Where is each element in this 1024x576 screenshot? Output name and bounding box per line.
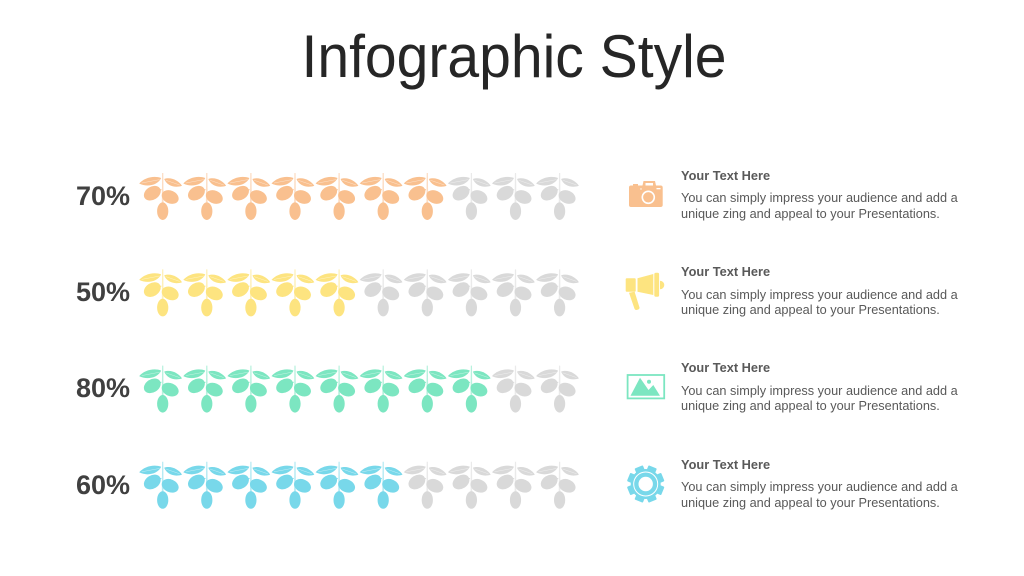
row 4 sprigs: 60% bbox=[139, 462, 579, 509]
percentage: 50%: 50% bbox=[76, 277, 130, 307]
text block 1: Your Text Here bbox=[681, 168, 770, 182]
title: Infographic Style bbox=[301, 22, 726, 90]
icon: picture bbox=[628, 375, 664, 398]
text block 4: unique zing and appeal to your Presentations. bbox=[681, 495, 940, 510]
text block 2: unique zing and appeal to your Presentations. bbox=[681, 302, 940, 317]
text block 3: You can simply impress your audience and add a bbox=[681, 383, 958, 398]
percentage: 70%: 70% bbox=[76, 181, 130, 211]
percentage: 80%: 80% bbox=[76, 373, 130, 403]
icon: gear bbox=[622, 460, 670, 508]
text block 1: You can simply impress your audience and add a bbox=[681, 190, 958, 205]
text block 2 bbox=[681, 264, 958, 317]
text block 3: Your Text Here bbox=[681, 360, 770, 375]
row 1 sprigs: 70% bbox=[139, 173, 579, 220]
row 3 sprigs: 80% bbox=[139, 366, 579, 413]
text block 3 bbox=[681, 360, 958, 413]
text block 2: You can simply impress your audience and add a bbox=[681, 287, 958, 302]
text block 1 bbox=[681, 168, 958, 221]
text block 4: Your Text Here bbox=[681, 457, 770, 472]
text block 4 bbox=[681, 457, 958, 510]
icon: camera bbox=[629, 181, 663, 207]
text block 4: You can simply impress your audience and add a bbox=[681, 479, 958, 494]
text block 1: unique zing and appeal to your Presentations. bbox=[681, 206, 940, 221]
icon: megaphone bbox=[626, 273, 664, 310]
row 2 sprigs: 50% bbox=[139, 269, 579, 316]
percentage: 60%: 60% bbox=[76, 470, 130, 500]
text block 2: Your Text Here bbox=[681, 264, 770, 279]
text block 3: unique zing and appeal to your Presentations. bbox=[681, 398, 940, 413]
